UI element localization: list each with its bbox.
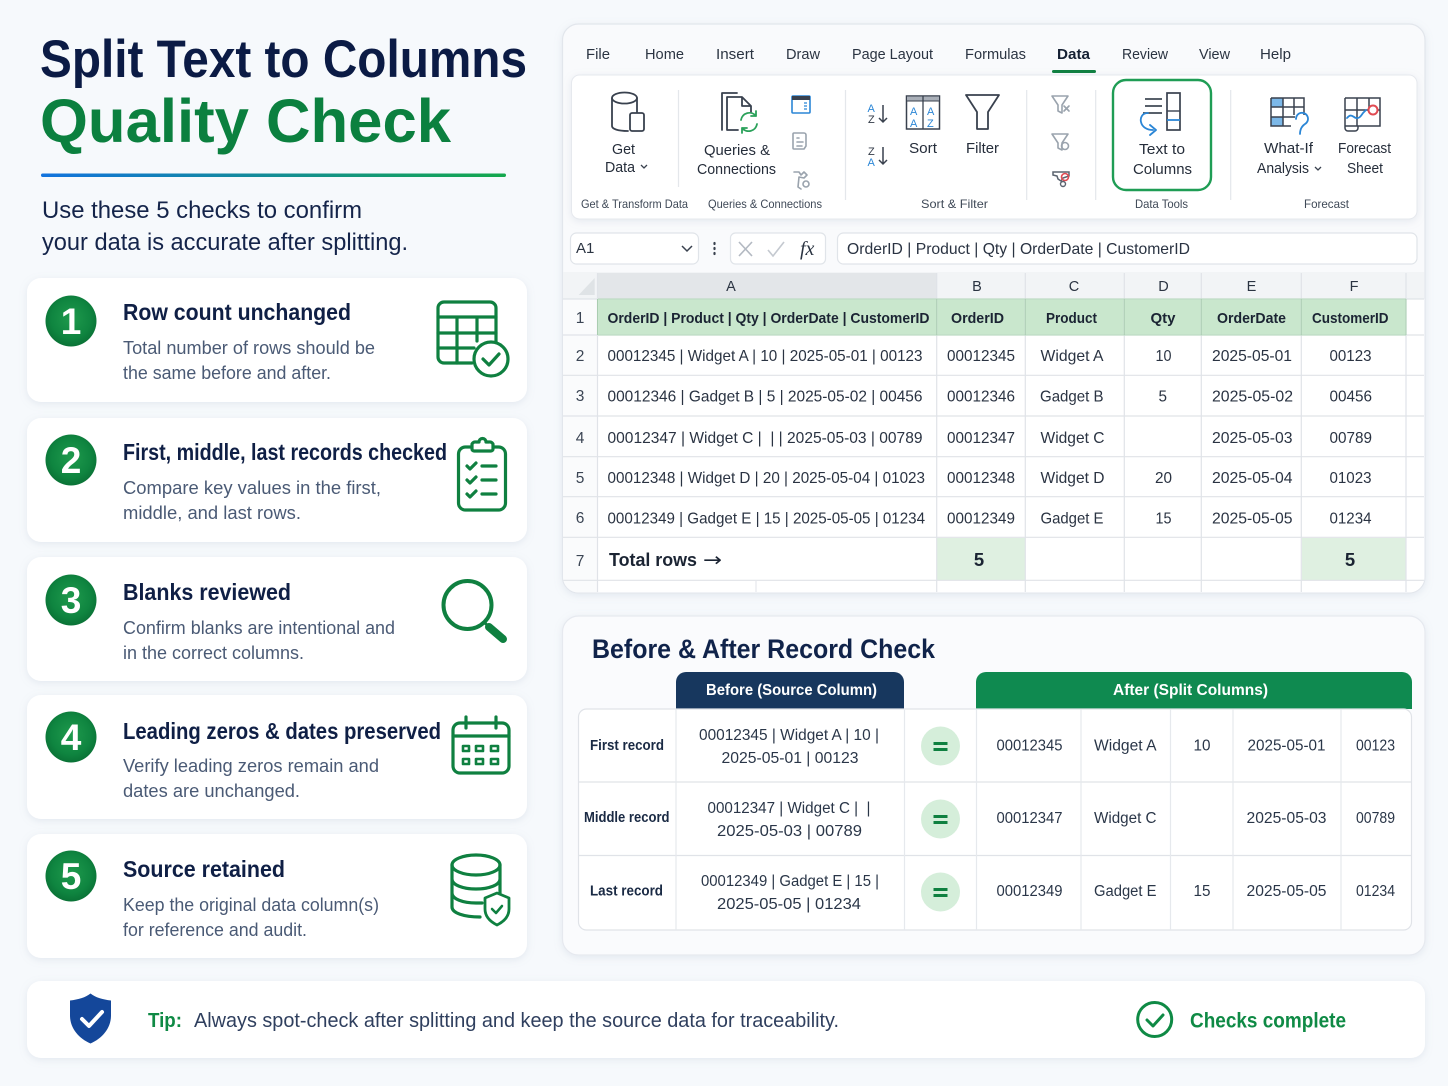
before header [676, 672, 904, 709]
icon: database with shield [452, 855, 509, 925]
icon: sort dialog: A [927, 106, 935, 118]
intro text: Use these 5 checks to confirm [42, 197, 362, 224]
icon: table with check [438, 302, 508, 376]
data row 5: 20 [1155, 470, 1172, 487]
number badge 5: 5 [61, 856, 81, 897]
icon: sort ascending: Z [868, 114, 875, 126]
row numbers: 2 [576, 348, 584, 365]
before cells: 2025-05-01 | 00123 [722, 750, 858, 767]
ribbon tabs: Insert [716, 46, 755, 63]
data row 4: 00012347 | Widget C | | | 2025-05-03 | 00789 [608, 430, 923, 447]
check 2 text: First, middle, last records checked [123, 439, 447, 465]
before cells: 00012347 | Widget C | | [708, 800, 870, 817]
label: text to columns: Columns [1133, 161, 1192, 178]
after cells: 10 [1194, 738, 1211, 754]
label: what-if analysis: What-If [1264, 140, 1314, 157]
data row 5: 00012348 [947, 470, 1015, 487]
icon: sort dialog: A [910, 106, 918, 118]
data row 3: 00456 [1330, 388, 1372, 406]
total row: Total rows [609, 549, 697, 570]
label: forecast sheet [1338, 140, 1392, 177]
number badge 1: 1 [61, 301, 81, 342]
icon: calendar [453, 717, 509, 773]
label: get data: Data [605, 159, 636, 176]
label: what-if analysis: Analysis [1257, 160, 1309, 177]
data row 5: 2025-05-04 [1212, 470, 1293, 487]
group labels: Queries & Connections [708, 197, 822, 211]
gradient divider under title [41, 174, 506, 177]
label: filter: Filter [966, 140, 999, 157]
row numbers: 6 [576, 510, 584, 527]
icon: sort dialog: Z [927, 118, 934, 130]
after cells [996, 738, 1395, 900]
record labels: Middle record [584, 810, 670, 826]
number badge 3 [46, 574, 96, 626]
data row 5 [608, 472, 1371, 486]
after cells: 2025-05-05 [1246, 883, 1326, 900]
data row 3 [608, 390, 1372, 405]
data row 2: 00012345 | Widget A | 10 | 2025-05-01 | 00123 [608, 348, 923, 365]
after cells: 00123 [1356, 738, 1395, 754]
after cells: 00012349 [996, 883, 1062, 900]
title: Quality Check [40, 87, 451, 155]
icon: clear reapply advanced filters [1052, 96, 1069, 186]
header row [608, 312, 1388, 326]
check 1 text: Total number of rows should be [123, 338, 375, 358]
column letters: C [1069, 279, 1079, 295]
data row 3: 2025-05-02 [1212, 388, 1293, 406]
column letters: F [1350, 279, 1359, 295]
ribbon tabs: Help [1260, 46, 1291, 63]
check 4 text [123, 718, 441, 801]
header row: Qty [1150, 310, 1176, 327]
row numbers: 4 [576, 430, 585, 447]
data row 3: 5 [1158, 388, 1167, 406]
spreadsheet grid [563, 272, 1424, 593]
check 5 text: Keep the original data column(s) [123, 895, 379, 915]
icon: check circle [1138, 1002, 1172, 1036]
panel: check 4 zeros and dates [27, 695, 527, 819]
comparison table [578, 709, 1412, 930]
after cells: Widget C [1094, 810, 1156, 827]
number badge 3: 3 [61, 580, 81, 621]
tip text: Always spot-check after splitting and keep the source data for traceability. [194, 1009, 839, 1032]
group labels: Get & Transform Data [581, 197, 688, 211]
number badge 4: 4 [61, 717, 82, 758]
check 4 text: Leading zeros & dates preserved [123, 718, 441, 744]
check 1 text: the same before and after. [123, 363, 331, 383]
ribbon tabs: Page Layout [852, 46, 934, 63]
intro text [42, 197, 408, 256]
after cells: 00012345 [996, 738, 1062, 754]
row numbers [576, 312, 584, 566]
number badge 2 [46, 434, 96, 486]
total row: 5 [1345, 549, 1355, 570]
checks complete label: Checks complete [1190, 1008, 1346, 1032]
icon: sort ascending: A [868, 103, 876, 115]
after cells: 01234 [1356, 883, 1395, 900]
header row: Product [1046, 310, 1097, 327]
check 3 text: Confirm blanks are intentional and [123, 618, 395, 638]
group labels [581, 197, 1350, 211]
icon: small query tools [792, 96, 810, 189]
data row 6: 15 [1156, 510, 1172, 528]
formula buttons: fx [800, 238, 815, 260]
check 3 text: in the correct columns. [123, 643, 304, 663]
active tab underline [1052, 70, 1096, 73]
icon: sort dialog: A [910, 118, 918, 130]
label: get data [605, 141, 647, 176]
panel: check 1 row count [27, 278, 527, 402]
icon: sort ascending [868, 103, 887, 126]
formula bar: OrderID | Product | Qty | OrderDate | CustomerID [847, 241, 1190, 258]
ribbon tabs: Draw [786, 46, 820, 63]
check 2 text: middle, and last rows. [123, 503, 301, 523]
data row 2: 00012345 [947, 348, 1015, 365]
before cells: 2025-05-05 | 01234 [717, 896, 861, 913]
label: sort: Sort [909, 140, 938, 157]
label: queries and connections: Queries & [704, 142, 770, 159]
icon: queries and connections [722, 93, 757, 133]
label: text to columns [1133, 141, 1192, 178]
icon: sort descending: A [868, 157, 876, 169]
group labels: Data Tools [1135, 197, 1188, 211]
after cells: 2025-05-03 [1246, 810, 1326, 827]
data row 5: 01023 [1330, 470, 1372, 487]
after cells: 00789 [1356, 810, 1395, 827]
data row 2: 00123 [1330, 348, 1372, 365]
number badge 1 [46, 296, 96, 346]
ribbon tabs: View [1199, 46, 1230, 63]
check 4 text: Verify leading zeros remain and [123, 756, 379, 776]
label: forecast sheet: Sheet [1347, 160, 1384, 177]
data row 5: Widget D [1040, 470, 1104, 487]
record labels [584, 738, 670, 900]
check 4 text: dates are unchanged. [123, 781, 300, 801]
after cells: 00012347 [996, 810, 1062, 827]
formula buttons [730, 233, 826, 264]
formula bar [838, 233, 1417, 264]
intro text: your data is accurate after splitting. [42, 229, 408, 256]
group labels: Sort & Filter [921, 197, 988, 211]
check 5 text [123, 856, 379, 940]
label: forecast sheet: Forecast [1338, 140, 1392, 157]
number badge 2: 2 [61, 440, 81, 481]
check 2 text: Compare key values in the first, [123, 478, 381, 498]
label: what-if analysis [1257, 140, 1321, 177]
column letters: D [1158, 279, 1169, 295]
data row 6 [608, 512, 1372, 527]
panel: check 5 source [27, 834, 527, 958]
panel: excel window [562, 24, 1425, 593]
data row 2: 2025-05-01 [1212, 348, 1292, 365]
data row 3: 00012346 [947, 388, 1015, 406]
row numbers: 5 [576, 470, 584, 487]
group labels: Forecast [1304, 197, 1350, 211]
tip text: Tip: [148, 1009, 182, 1032]
icon: text to columns [1141, 93, 1180, 135]
after cells: 2025-05-01 [1248, 738, 1326, 754]
icon: sort descending: Z [868, 146, 875, 158]
data row 2: 10 [1156, 348, 1172, 365]
panel: tip bar [27, 981, 1425, 1058]
check 1 text: Row count unchanged [123, 299, 351, 325]
name box [570, 233, 698, 264]
after cells: Widget A [1094, 738, 1157, 754]
before header: Before (Source Column) [706, 682, 877, 699]
before cells: 00012345 | Widget A | 10 | [699, 727, 879, 744]
check 1 text [123, 299, 375, 383]
icon: clipboard checklist [458, 439, 506, 510]
title [40, 30, 527, 155]
total row: 5 [974, 549, 984, 570]
title: Split Text to Columns [40, 30, 527, 89]
after header [976, 672, 1412, 709]
ribbon tabs: Data [1057, 46, 1091, 63]
heading: Before & After Record Check [592, 634, 936, 664]
icon: sort dialog [906, 96, 940, 130]
header row: OrderDate [1217, 310, 1286, 327]
data row 4: 00789 [1330, 430, 1372, 447]
label: queries and connections: Connections [697, 161, 776, 178]
data row 3: 00012346 | Gadget B | 5 | 2025-05-02 | 00456 [608, 388, 923, 406]
label: text to columns: Text to [1139, 141, 1185, 158]
data row 6: Gadget E [1040, 510, 1104, 528]
formula dots [713, 243, 716, 254]
label: get data: Get [612, 141, 636, 158]
row numbers: 3 [576, 388, 584, 405]
icon: magnifier [444, 581, 503, 639]
before cells [699, 727, 879, 913]
data row 3: Gadget B [1040, 388, 1104, 406]
before cells: 2025-05-03 | 00789 [717, 823, 862, 840]
name box: A1 [576, 240, 594, 257]
data row 2 [608, 350, 1371, 364]
data row 5: 00012348 | Widget D | 20 | 2025-05-04 | 01023 [608, 470, 925, 487]
record labels: First record [590, 738, 664, 754]
row numbers: 7 [576, 553, 584, 570]
icon: filter funnel [966, 95, 999, 129]
icon: forecast sheet [1345, 98, 1380, 131]
number badge 4 [46, 712, 96, 762]
after header: After (Split Columns) [1113, 682, 1268, 699]
ribbon tabs [586, 46, 1291, 63]
row numbers: 1 [576, 310, 584, 327]
column letters: A [726, 279, 736, 295]
icon: get data [612, 92, 644, 131]
data row 4: 00012347 [947, 430, 1015, 447]
check 3 text [123, 579, 395, 663]
ribbon panel [572, 75, 1417, 219]
equals badges [921, 726, 960, 912]
data row 6: 00012349 [947, 510, 1015, 528]
check 2 text [123, 439, 447, 523]
total row: → [703, 549, 722, 571]
header row: OrderID | Product | Qty | OrderDate | CustomerID [608, 310, 930, 327]
icon: sort descending [868, 146, 887, 169]
icon: what-if analysis [1271, 98, 1308, 134]
data row 6: 01234 [1330, 510, 1372, 528]
ribbon tabs: Home [645, 46, 684, 63]
record labels: Last record [590, 884, 663, 900]
panel: check 3 blanks [27, 557, 527, 681]
number badge 5 [46, 850, 96, 902]
label: queries and connections [697, 142, 776, 178]
check 5 text: Source retained [123, 856, 285, 882]
data row 2: Widget A [1040, 348, 1104, 365]
panel: check 2 records [27, 418, 527, 542]
data row 4: Widget C [1040, 430, 1104, 447]
highlight: text to columns [1113, 80, 1211, 190]
icon: navy shield [70, 994, 111, 1044]
data row 4: 2025-05-03 [1212, 430, 1293, 447]
after cells: 15 [1194, 883, 1210, 900]
check 3 text: Blanks reviewed [123, 579, 291, 605]
data row 6: 2025-05-05 [1212, 510, 1293, 528]
ribbon tabs: Formulas [965, 46, 1026, 63]
before cells: 00012349 | Gadget E | 15 | [701, 873, 879, 890]
after cells: Gadget E [1094, 883, 1156, 900]
ribbon tabs: File [586, 46, 610, 63]
column letters: E [1247, 279, 1257, 295]
data row 6: 00012349 | Gadget E | 15 | 2025-05-05 | 01234 [608, 510, 925, 528]
total row [609, 552, 1355, 566]
column letters [726, 281, 1358, 291]
data row 4 [608, 432, 1372, 446]
check 5 text: for reference and audit. [123, 920, 307, 940]
header row: OrderID [951, 310, 1004, 327]
column letters: B [972, 279, 982, 295]
panel: before and after record check [562, 616, 1425, 955]
ribbon tabs: Review [1122, 46, 1168, 63]
header row: CustomerID [1312, 310, 1389, 327]
